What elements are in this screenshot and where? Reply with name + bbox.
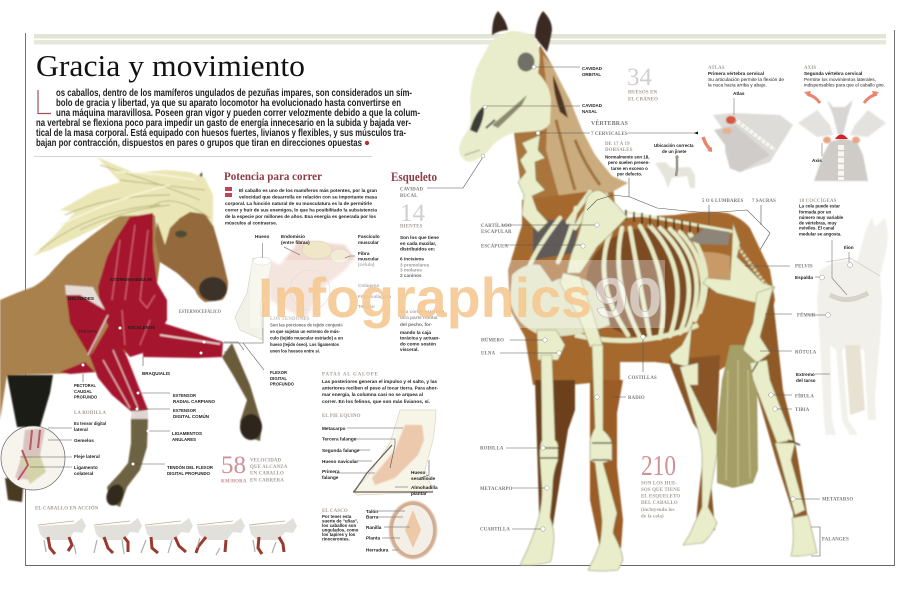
rider position: Ubicación correcta [654, 143, 694, 148]
near hind leg flesh [740, 290, 815, 545]
stat: 14 dientes: visceral. [400, 347, 419, 352]
stat: 14 dientes: otra parte frontal [400, 315, 438, 320]
skeleton labels: FALANGES [822, 538, 849, 542]
panel: atlas: la nuca hacia arriba y abajo. [708, 82, 767, 88]
stat: 34 huesos: 34 [627, 64, 652, 91]
near humerus [560, 273, 603, 347]
note: dorsales [605, 142, 650, 176]
hoof section: el pie equino: Hueso navicular [322, 459, 358, 464]
divider [34, 156, 372, 158]
far humerus [537, 330, 565, 360]
text: los tendones: Son las porciones de tejido conjunti- [270, 322, 343, 328]
text: potencia: El caballo es uno de los mamíferos más potentes, por la gran [239, 188, 377, 193]
skeleton labels: RÓTULA [795, 350, 817, 356]
labels: muscles: TRÍCEPS [78, 327, 97, 334]
labels: muscle diagram: Fibra [358, 251, 370, 256]
stat: 14 dientes: DIENTES [400, 224, 423, 230]
watermark: Infographics90: 90 [594, 266, 662, 329]
stat: 58 km/hora: KM/HORA [221, 480, 247, 484]
text: los tendones: culo (tejido muscular estriado) a un [270, 336, 343, 340]
labels: muscles: LA RODILLA [74, 411, 106, 416]
skeleton labels: VÉRTEBRAS [591, 119, 628, 127]
skeleton labels: PELVIS [795, 264, 813, 270]
panel: coccígeas and rear view [795, 198, 888, 435]
text: los tendones [270, 317, 343, 354]
labels: muscles: CAUDAL [74, 389, 92, 394]
stat: 210 huesos: DEL CABALLO [641, 501, 678, 506]
note: dorsales: DE 17 A 19 [605, 142, 630, 147]
skeleton horse illustration [459, 11, 817, 571]
text: patas al galope: mar energía, la columna casi no se arquea al [322, 392, 423, 397]
panel: coccígeas and rear view: del tarso [796, 378, 816, 383]
stat: 14 dientes: 2 caninos [400, 273, 422, 278]
stat: 58 km/hora: QUE ALCANZA [250, 465, 288, 470]
text: los tendones: hueso (tejido óseo). Los ligamentos [270, 342, 339, 347]
skeleton labels: NASAL [582, 109, 597, 114]
note: dorsales: tarse en exceso o [611, 166, 648, 171]
intro text block: os caballos, dentro de los mamíferos ungulados de pezuñas impares, son considerados un sím- [56, 88, 412, 99]
raised lower leg [222, 343, 262, 441]
neck and chest muscle [98, 213, 167, 357]
stat: 58 km/hora: VELOCIDAD [250, 458, 282, 464]
stat: 14 dientes: 3 molares [400, 268, 422, 272]
hoof section: el pie equino: falange [322, 475, 339, 480]
note: dorsales: por defecto. [617, 172, 642, 176]
hoof section: el pie equino: EL PIE EQUINO [322, 414, 361, 419]
skeleton labels: CAVIDAD [582, 66, 603, 71]
skeleton labels: ESCAPULAR [481, 230, 512, 235]
panel: atlas [703, 66, 793, 172]
stat: 14 dientes: distribuidos en: [400, 246, 436, 252]
hoof section: el pie equino: sesamoide [411, 476, 436, 481]
labels: muscles: LIGAMENTOS [172, 431, 202, 436]
labels: muscles: PECTORAL [74, 383, 96, 388]
muscled horse illustration [0, 157, 262, 508]
inset: la rodilla [1, 426, 72, 490]
neck [514, 45, 615, 220]
pectoral caudal muscle [60, 362, 95, 374]
panel: atlas: Primera vértebra cervical [708, 71, 764, 76]
text: los tendones: unen los huesos entre sí. [270, 348, 320, 354]
far hind bones [670, 325, 692, 367]
labels: muscles: lateral [74, 427, 88, 432]
cervical vertebrae [518, 135, 548, 232]
labels: muscles: PROFUNDO [270, 382, 294, 386]
labels: muscles: DELTOIDES [68, 296, 94, 301]
skeleton labels: TIBIA [795, 408, 810, 413]
gait frame 3 [141, 518, 193, 553]
panel: el caballo en acción: EL CABALLO EN ACCIÓN [35, 506, 99, 512]
tail [717, 345, 758, 488]
note: dorsales: DORSALES [605, 148, 633, 153]
hoof sole: el casco: los caballos son [322, 523, 356, 528]
hoof sole: el casco: Por tener esta [322, 514, 352, 519]
labels: muscle diagram: (entre fibras) [281, 240, 310, 245]
scapula [567, 190, 627, 273]
skeleton labels: HÚMERO [481, 338, 504, 344]
text: potencia: músculos al contraerse. [225, 220, 277, 226]
horse body [0, 215, 160, 420]
stat: 14 dientes: do como sostén [400, 342, 436, 346]
muscle and tendon diagram [220, 240, 355, 343]
skeleton labels: FÉMUR [797, 312, 816, 318]
panel: axis: indispensables para que el caballo gire. [804, 82, 885, 88]
labels: muscles: DIGITAL COMÚN [173, 413, 209, 419]
skeleton labels: FÍBULA [795, 394, 814, 400]
ears [492, 11, 508, 35]
panel: axis: Segunda vértebra cervical [804, 71, 862, 76]
labels: muscle diagram: Colágeno [358, 283, 379, 288]
text: los tendones: LOS TENDONES [270, 317, 310, 322]
panel: axis: AXIS [804, 66, 816, 71]
intro text block: una máquina maravillosa. Poseen gran vigor y pueden correr velozmente debido a que la colum- [56, 108, 420, 119]
stat: 14 dientes: BUCAL [400, 194, 418, 199]
skeleton labels: RADIO [628, 396, 645, 401]
text: potencia: correr y huir de sus enemigos, lo que ha posibilitado la subsistencia [225, 208, 377, 212]
hoof section: el pie equino: Almohadilla [411, 485, 438, 490]
text: patas al galope: Las posteriores generan el impulso y el salto, y las [322, 379, 437, 384]
stat: 210 huesos: de la cola) [641, 514, 664, 520]
panel: axis [798, 66, 886, 181]
labels: muscles: RADIAL CARPIANO [173, 399, 215, 404]
labels: muscles: DIGITAL PROFUNDO [167, 471, 210, 476]
panel: coccígeas and rear view: móviles. El canal [799, 226, 834, 230]
labels: muscles: ANULARES [172, 437, 196, 442]
skeleton labels: ESCÁPULA [481, 244, 508, 250]
hoof section: el pie equino: Metacarpo [322, 426, 346, 431]
stat: 14 dientes: CAVIDAD [400, 188, 423, 192]
labels: muscles: ESTERNOCEFÁLICO [179, 309, 221, 315]
hoof section: el pie equino [322, 410, 438, 496]
joint ticks [540, 362, 800, 460]
skeleton labels: METATARSO [822, 498, 853, 502]
mane [33, 157, 213, 256]
panel: coccígeas and rear view: número muy variable [799, 215, 844, 220]
skeleton labels: CUARTILLA [480, 528, 510, 532]
text: potencia [225, 187, 377, 226]
hoof section: el pie equino: Primera [322, 469, 340, 474]
shoulder muscle [65, 285, 107, 357]
skeleton labels [480, 66, 853, 542]
panel: axis: Axis [812, 158, 822, 163]
text: potencia: de la especie por millones de años. Esa energía es generada por los [225, 214, 376, 219]
heading: potencia para correr: Potencia para correr [224, 171, 322, 183]
labels: muscles: Ligamento [74, 465, 98, 470]
stat: 210 huesos [641, 450, 681, 520]
labels: muscle diagram: Fibra colágena [358, 294, 391, 299]
stat: 14 dientes: una con el esternón, [400, 309, 446, 314]
lumbar vertebrae [688, 228, 730, 245]
labels: muscles: Gemelos [74, 438, 94, 443]
hoof section: el pie equino: Tercera falange [322, 436, 357, 442]
stat: 210 huesos: SON LOS HUE- [641, 482, 678, 486]
title: Gracia y movimiento [36, 48, 305, 83]
panel: coccígeas and rear view: Espalda [795, 275, 813, 280]
watermark: Infographics90: Infographics [258, 266, 592, 329]
text: patas al galope: anteriores reciben el peso al tocar tierra. Para ahor- [322, 386, 438, 390]
intro text block [36, 88, 420, 149]
neck ribs [528, 218, 560, 270]
panel: coccígeas and rear view: de vértebras, muy [799, 220, 837, 226]
labels: muscles: FLEXOR [270, 370, 288, 375]
labels: muscle diagram: Tendón [358, 304, 375, 309]
labels: muscles: TENDÓN DEL FLEXOR [167, 463, 214, 470]
labels: muscle diagram: Fascículo [358, 234, 380, 239]
head [155, 185, 228, 302]
stat: 34 huesos: EL CRÁNEO [628, 96, 658, 102]
raised foreleg muscle [143, 323, 223, 358]
labels: muscle diagram: (célula) [358, 262, 375, 267]
labels: muscles: PROFUNDO [74, 394, 97, 400]
stat: 34 huesos: HUESOS EN [628, 90, 658, 96]
stat: 210 huesos: EL ESQUELETO [641, 494, 680, 500]
skeleton labels: CAVIDAD [582, 103, 603, 108]
text: potencia: corporal. La función natural de su musculatura es la de permitirle [225, 201, 372, 206]
stat: 210 huesos: SOS QUE TIENE [641, 488, 681, 493]
text: patas al galope [322, 372, 438, 404]
skeleton labels: 7 SACRAS [752, 199, 776, 204]
far foreleg bones [520, 355, 558, 565]
stat: 14 dientes: mando la caja [400, 330, 431, 335]
panel: coccígeas and rear view: medular se angosta. [799, 232, 841, 236]
near cannon and hoof [775, 443, 805, 515]
spine [625, 212, 735, 232]
torso [508, 190, 775, 385]
hoof sole: el casco: Barra [366, 514, 379, 520]
pelvis [703, 223, 775, 303]
gait frame 1 [38, 518, 86, 554]
rider position [654, 143, 695, 188]
sacral tail bones [738, 247, 766, 285]
stat: 14 dientes: 14 [400, 200, 426, 227]
stat: 210 huesos: (incluyendo los [641, 508, 675, 513]
labels: muscle diagram: muscular [358, 240, 379, 245]
ribs [604, 228, 628, 335]
far foreleg flesh [533, 380, 575, 540]
labels: muscle diagram: Hueso [255, 234, 269, 239]
labels: muscles: DIGITAL [270, 376, 287, 381]
intro text block: bolo de gracia y libertad, ya que su aparato locomotor ha evolucionado hasta convertirse en [56, 98, 401, 109]
shoulder joints [510, 264, 610, 336]
gait frame 2 [94, 518, 142, 554]
skeleton callouts [481, 65, 820, 556]
ribcage backdrop [586, 228, 710, 338]
stat: 58 km/hora [221, 452, 288, 484]
note: dorsales: Normalmente son 18, [605, 154, 649, 160]
hoof sole: el casco: suerte de "uñas", [322, 519, 358, 524]
panel: coccígeas and rear view: Extremo [796, 372, 815, 377]
panel: atlas: Atlas [733, 91, 745, 96]
labels: muscles: Fleje lateral [74, 454, 100, 459]
skull [459, 31, 551, 162]
upper foreleg muscle [90, 323, 148, 412]
near foreleg bones [588, 345, 623, 571]
stat: 14 dientes [400, 157, 483, 352]
labels: muscles: EXTENSOR [173, 408, 197, 413]
stat: 210 huesos: 210 [641, 450, 676, 482]
hoof sole: el casco: rinocerontes. [322, 537, 350, 542]
top decorative band [34, 34, 886, 44]
skeleton labels: ORBITAL [582, 72, 601, 77]
near tibia [750, 360, 793, 443]
hoof section: el pie equino: plantar [411, 491, 427, 496]
panel: axis: Permite los movimientos laterales, [804, 77, 876, 82]
skeleton labels: 7 CERVICALES [591, 132, 628, 137]
note: dorsales: pero suelen presen- [608, 160, 650, 165]
rider position: de un jinete [662, 149, 687, 154]
hoof sole: el casco: Ranilla [366, 525, 382, 530]
labels: muscles: Ex tensor digital [74, 421, 106, 426]
skeleton labels: 5 O 6 LUMBARES [702, 199, 744, 204]
stat: 34 huesos [627, 64, 658, 102]
stat: 14 dientes: 3 premolares [400, 262, 430, 268]
labels: muscles: colateral [74, 471, 93, 476]
skeleton labels: CARTÍLAGO [481, 223, 512, 229]
near foreleg flesh [590, 380, 623, 548]
stat: 14 dientes: Son los que tiene [400, 235, 439, 240]
hoof sole: el casco [322, 501, 437, 559]
panel: coccígeas and rear view: Ilion [844, 245, 854, 250]
panel: atlas: ATLAS [708, 66, 725, 71]
gait frame 5 [249, 518, 297, 554]
text: potencia: velocidad que desarrolla en relación con su importante masa [239, 194, 377, 200]
near femur [743, 287, 773, 363]
stat: 14 dientes: en cada maxilar, [400, 241, 436, 246]
panel: coccígeas and rear view: formada por un [799, 210, 832, 214]
text: patas al galope: correr. En los felinos, que son más livianos, sí. [322, 399, 430, 404]
stat: 58 km/hora: UN CABALLO [250, 472, 284, 476]
hoof sole: el casco: los tapires y los [322, 532, 356, 537]
lower front leg [107, 418, 148, 507]
labels: muscle diagram: Endomisio [281, 234, 305, 239]
intro text block: bajan por contracción, dispuestos en pares o grupos que tiran en direcciones opuestas [36, 138, 362, 149]
labels: muscle diagram: muscular [358, 256, 379, 262]
stat: 14 dientes: torácica y actuan- [400, 336, 440, 340]
dark thoracic area [533, 220, 580, 260]
hoof section: el pie equino: Segunda falange [322, 448, 360, 453]
hoof sole: el casco: Herradura [366, 548, 389, 552]
hoof sole: el casco: Talón [366, 509, 378, 514]
text: patas al galope: PATAS AL GALOPE [322, 372, 379, 378]
hoof sole: el casco: EL CASCO [322, 509, 348, 514]
stat: 14 dientes: 6 incisivos [400, 256, 424, 262]
stat: 14 dientes: del pecho, for- [400, 322, 433, 327]
labels: muscles: ESCALENOS [128, 325, 155, 330]
stat: 58 km/hora: EN CARRERA [250, 478, 284, 484]
panel: el caballo en acción [35, 506, 297, 555]
hoof sole: el casco: Planta [366, 536, 380, 540]
hoof section: el pie equino: Hueso [411, 470, 425, 475]
mane [543, 55, 628, 200]
skeleton labels: METACARPO [480, 487, 513, 492]
labels: muscle diagram [255, 234, 391, 309]
labels: muscles [68, 277, 294, 476]
intro text block: na vertebral se flexiona poco para impedir un gasto de energía innecesario en la subida y bajada ver- [36, 118, 411, 129]
panel: atlas: Su articulación permite la flexión de [708, 77, 784, 82]
labels: muscles: ESTERNOMANDIBULAR [110, 277, 153, 282]
text: los tendones: vo que sujetan un extremo de mús- [270, 329, 340, 334]
gait frame 4 [196, 518, 245, 555]
heading: esqueleto: Esqueleto [391, 169, 437, 184]
labels: muscles: EXTENSOR [173, 393, 197, 398]
stat: 58 km/hora: 58 [221, 452, 246, 479]
skeleton labels: COSTILLAS [628, 376, 657, 381]
far hind leg flesh [668, 355, 720, 535]
panel: coccígeas and rear view: La cola puede estar [799, 204, 840, 208]
panel: coccígeas and rear view: 18 COCCÍGEAS [799, 198, 837, 204]
skeleton labels: RODILLA [480, 446, 504, 452]
intro text block: tical de la masa corporal. Está equipado con huesos fuertes, livianos y flexibles, y sus músculos tra- [36, 128, 406, 139]
skeleton labels: ULNA [481, 352, 496, 356]
labels: muscles: BRAQUIALIS [142, 371, 170, 376]
hoof sole: el casco: ungulados, como [322, 528, 359, 533]
